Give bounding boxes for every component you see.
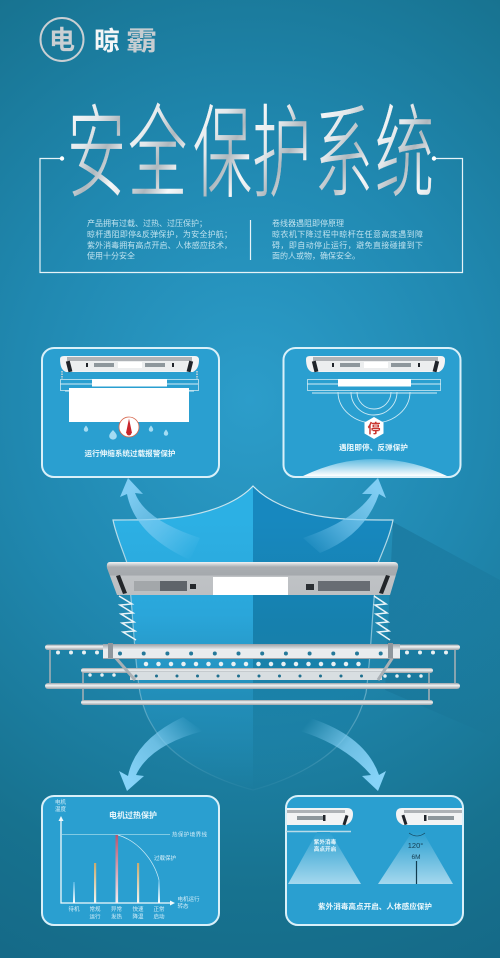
curve label: 过载保护 <box>154 854 177 862</box>
logo: 霸 <box>126 27 157 56</box>
title: 全 <box>128 97 187 211</box>
cone label <box>314 838 337 853</box>
device: overload panel <box>60 356 199 372</box>
rack <box>45 562 460 705</box>
text block: product summary <box>87 218 232 260</box>
shield <box>113 486 393 790</box>
lower tubes <box>45 644 460 705</box>
axes <box>58 816 175 906</box>
arrow: down left <box>119 717 203 791</box>
text block: product summary: 产品拥有过载、过热、过压保护； <box>87 218 207 228</box>
caption: 遇阻即停、反弹保护 <box>339 442 408 452</box>
title <box>67 97 434 211</box>
panel: overload alarm <box>42 348 219 477</box>
device: sensor right <box>396 808 462 825</box>
text block: product summary: 紫外消毒拥有高点开启、人体感应技术， <box>87 240 232 250</box>
cone label: 紫外消毒 <box>314 838 337 846</box>
x axis labels: 运行 <box>89 912 101 920</box>
title: 保 <box>193 97 252 211</box>
device: stop panel <box>306 356 445 372</box>
sensor angle: 6M <box>411 854 421 861</box>
logo: 晾 <box>94 26 120 56</box>
drying bar <box>60 371 198 391</box>
x axis labels: 转态 <box>177 902 189 910</box>
chart title: 电机过热保护 <box>109 810 157 820</box>
panel: stop and rebound <box>284 348 460 477</box>
cone: UV light <box>288 832 361 884</box>
x axis labels: 待机 <box>68 905 80 913</box>
title: 安 <box>67 97 126 211</box>
top unit <box>107 562 398 595</box>
title: 系 <box>314 97 373 211</box>
arrow: down right <box>300 717 386 791</box>
threshold line <box>62 834 170 836</box>
axis label: temperature: 电机 <box>55 798 66 806</box>
panel: motor overheat chart <box>42 796 219 925</box>
text block: product summary: 使用十分安全 <box>87 250 135 260</box>
shield shadow <box>385 522 500 740</box>
protection curve <box>118 835 159 880</box>
text block: stop principle: 卷线器遇阻即停原理 <box>272 218 344 228</box>
x axis labels: 快速 <box>132 905 144 913</box>
carriage <box>130 672 382 680</box>
description frame <box>40 156 462 272</box>
cone label: 高点开启 <box>314 845 337 853</box>
drying bar <box>307 379 441 393</box>
threshold label: 热保护境界线 <box>172 830 207 838</box>
title: 护 <box>252 97 311 211</box>
temperature bars <box>73 835 160 903</box>
panel: UV and body sensing <box>286 796 463 925</box>
icon: water drops <box>84 426 168 440</box>
x axis labels: 正常 <box>153 905 165 913</box>
axis label: temperature <box>55 798 66 813</box>
x axis labels: 电机运行 <box>177 895 200 903</box>
x axis labels <box>68 895 200 920</box>
icon: stop hexagon: 停 <box>367 421 381 436</box>
white load sheet <box>69 388 189 422</box>
axis label: temperature: 温度 <box>55 805 66 813</box>
text block: stop principle: 碍，即自动停止运行，避免直接碰撞到下 <box>272 240 423 250</box>
text block: stop principle <box>272 218 423 260</box>
logo: 电 <box>49 25 75 55</box>
x axis labels: 发热 <box>111 912 122 920</box>
cone: sensor range <box>378 832 453 884</box>
caption: 运行伸缩系统过载报警保护 <box>84 448 176 458</box>
x axis labels: 启动 <box>153 912 165 920</box>
logo <box>40 18 157 61</box>
arrow: up right <box>303 478 386 553</box>
caption: 紫外消毒高点开启、人体感应保护 <box>318 901 432 911</box>
text block: product summary: 晾杆遇阻即停&反弹保护，为安全护航； <box>87 229 232 239</box>
icon: stop hexagon <box>364 417 384 439</box>
device: UV left <box>286 808 353 832</box>
hooks <box>58 652 450 676</box>
icon: warning gauge <box>119 417 139 437</box>
text block: stop principle: 晾衣机下降过程中晾杆在任意高度遇到障 <box>272 229 423 239</box>
x axis labels: 异常 <box>111 905 122 913</box>
arrow: up left <box>120 478 200 560</box>
text block: stop principle: 面的人或物，确保安全。 <box>272 250 360 260</box>
sensor angle: 120° <box>408 841 423 850</box>
title: 统 <box>375 97 434 211</box>
x axis labels: 常规 <box>89 905 101 913</box>
sensing arcs <box>338 392 410 423</box>
dome <box>303 459 447 476</box>
sensor angle <box>408 833 425 884</box>
scissor arms <box>119 596 390 640</box>
x axis labels: 降温 <box>132 912 144 920</box>
